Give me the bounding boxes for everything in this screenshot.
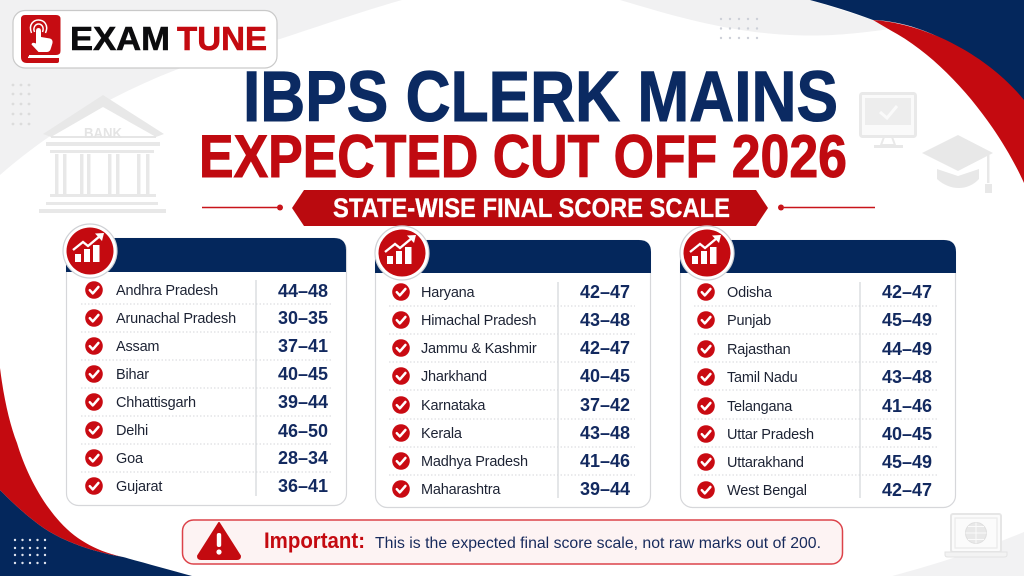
callout: important note — [182, 520, 842, 564]
rows: Maharashtra — [421, 482, 501, 498]
rows: Jharkhand — [421, 369, 487, 385]
logo: ExamTune — [13, 10, 277, 68]
icon: chart badge — [375, 226, 429, 280]
rows: Tamil Nadu — [727, 370, 798, 386]
rows: 44–49 — [882, 339, 932, 359]
icon: laptop with globe — [945, 514, 1007, 557]
rows: 40–45 — [580, 366, 630, 386]
background: red bottom-left swoosh — [0, 368, 123, 557]
rows: Gujarat — [116, 479, 162, 495]
rows: Delhi — [116, 423, 148, 439]
rows: 39–44 — [580, 479, 630, 499]
rows: Assam — [116, 339, 159, 355]
panel header bar — [375, 240, 651, 273]
rows: 30–35 — [278, 308, 328, 328]
rows: Goa — [116, 451, 144, 467]
panel: states O to W — [680, 226, 956, 508]
rows: 41–46 — [882, 396, 932, 416]
rows — [697, 282, 932, 500]
title line 1: IBPS CLERK MAINS — [243, 58, 838, 137]
rows: 39–44 — [278, 392, 328, 412]
rows: 40–45 — [278, 364, 328, 384]
rows: 37–41 — [278, 336, 328, 356]
rows: Haryana — [421, 285, 476, 301]
rows: West Bengal — [727, 483, 807, 499]
rows — [85, 281, 328, 496]
rows: Jammu & Kashmir — [421, 341, 537, 357]
rows: 41–46 — [580, 451, 630, 471]
rows: Uttar Pradesh — [727, 427, 814, 443]
background: navy top-right corner — [810, 0, 1024, 110]
rows: Kerala — [421, 426, 463, 442]
icon: graduation cap — [922, 135, 993, 193]
rows: 42–47 — [882, 282, 932, 302]
background: light grey bottom-right swoosh — [892, 532, 1024, 576]
callout label: Important: — [264, 528, 365, 553]
rows: 36–41 — [278, 476, 328, 496]
callout text: This is the expected final score scale, not raw marks out of 200. — [375, 535, 821, 552]
rows: 45–49 — [882, 452, 932, 472]
rows: 40–45 — [882, 424, 932, 444]
icon: chart badge — [680, 226, 734, 280]
background: light grey top-left swoosh — [0, 0, 402, 175]
rows: 43–48 — [580, 423, 630, 443]
panel: states H to M — [375, 226, 651, 508]
icon: chart badge — [63, 224, 117, 278]
decoration: grey dots top-left — [12, 84, 30, 125]
icon: warning triangle — [198, 523, 240, 559]
rows: 37–42 — [580, 395, 630, 415]
rows: 43–48 — [882, 367, 932, 387]
rows: 43–48 — [580, 310, 630, 330]
rows: 46–50 — [278, 421, 328, 441]
rows: Punjab — [727, 313, 771, 329]
rows: Bihar — [116, 367, 149, 383]
icon: bank building: BANK — [84, 125, 122, 142]
rows: Karnataka — [421, 398, 486, 414]
rows: Madhya Pradesh — [421, 454, 528, 470]
rows: Uttarakhand — [727, 455, 804, 471]
rows: 42–47 — [580, 338, 630, 358]
rows: 28–34 — [278, 448, 328, 468]
decoration: grey dots top-right — [720, 18, 758, 39]
rows: Andhra Pradesh — [116, 283, 218, 299]
logo text: EXAM: EXAM — [70, 21, 170, 58]
icon: monitor with check — [860, 94, 916, 148]
background: light grey top-right swoosh — [620, 0, 890, 36]
panel header bar — [66, 238, 346, 272]
rows: Telangana — [727, 399, 793, 415]
subtitle banner: STATE-WISE FINAL SCORE SCALE — [333, 193, 730, 223]
icon: logo tapping hand — [21, 15, 60, 63]
decoration: white dots bottom-left — [14, 539, 46, 564]
subtitle banner — [202, 190, 875, 226]
background: red top-right swoosh — [873, 20, 1024, 183]
rows: 44–48 — [278, 281, 328, 301]
rows — [392, 282, 630, 499]
title line 2: EXPECTED CUT OFF 2026 — [199, 123, 847, 190]
rows: 42–47 — [580, 282, 630, 302]
panel: states A to G — [63, 224, 346, 506]
rows: 42–47 — [882, 480, 932, 500]
icon: bank building — [39, 95, 166, 213]
rows: Himachal Pradesh — [421, 313, 536, 329]
rows: Rajasthan — [727, 342, 791, 358]
panel header bar — [680, 240, 956, 273]
rows: Arunachal Pradesh — [116, 311, 236, 327]
rows: 45–49 — [882, 310, 932, 330]
rows: Chhattisgarh — [116, 395, 196, 411]
rows: Odisha — [727, 285, 773, 301]
background: navy bottom-left corner — [0, 490, 192, 576]
logo text: TUNE: TUNE — [177, 21, 267, 58]
